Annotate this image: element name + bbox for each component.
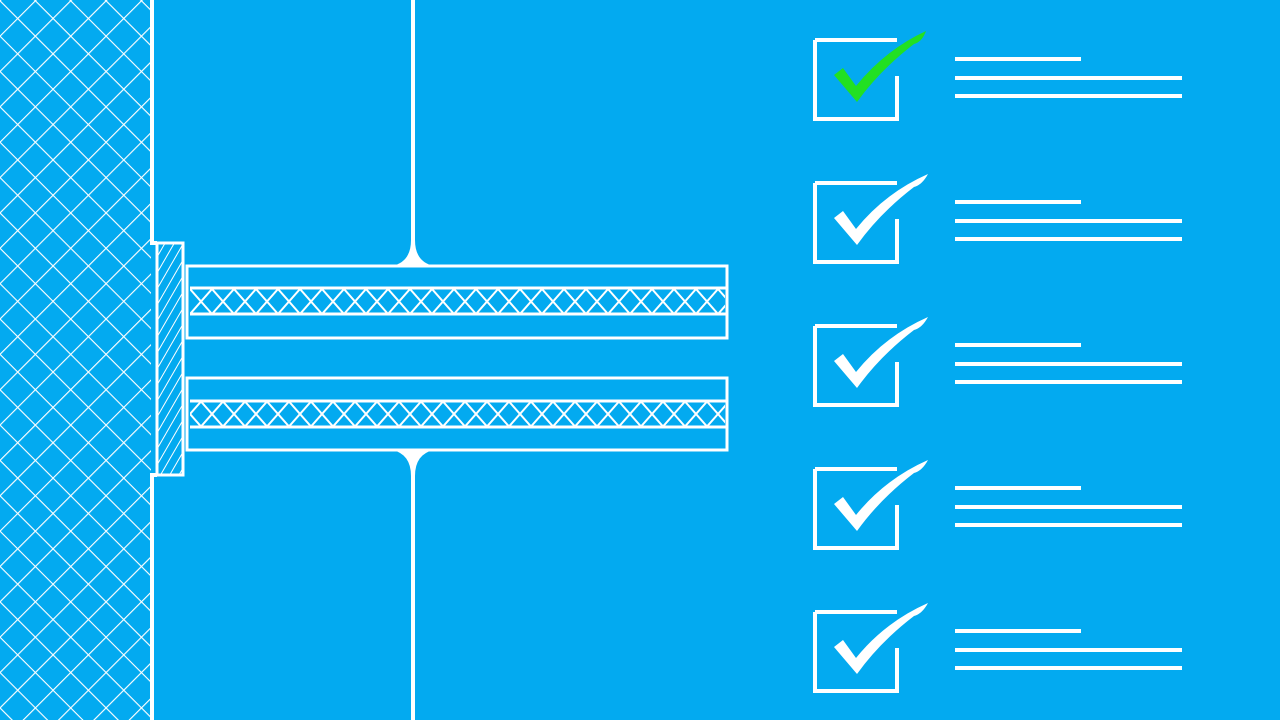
wall: crosshatched section [0,0,157,720]
item 1 (green check) [815,31,1182,119]
flange plate [157,243,183,475]
support line bottom [392,450,434,720]
item 3 [815,317,1182,405]
item 5 [815,603,1182,691]
upper pipe [187,266,727,338]
checklist [815,31,1182,691]
lower pipe [187,378,727,450]
item 2 [815,174,1182,262]
support line top [392,0,434,266]
item 4 [815,460,1182,548]
